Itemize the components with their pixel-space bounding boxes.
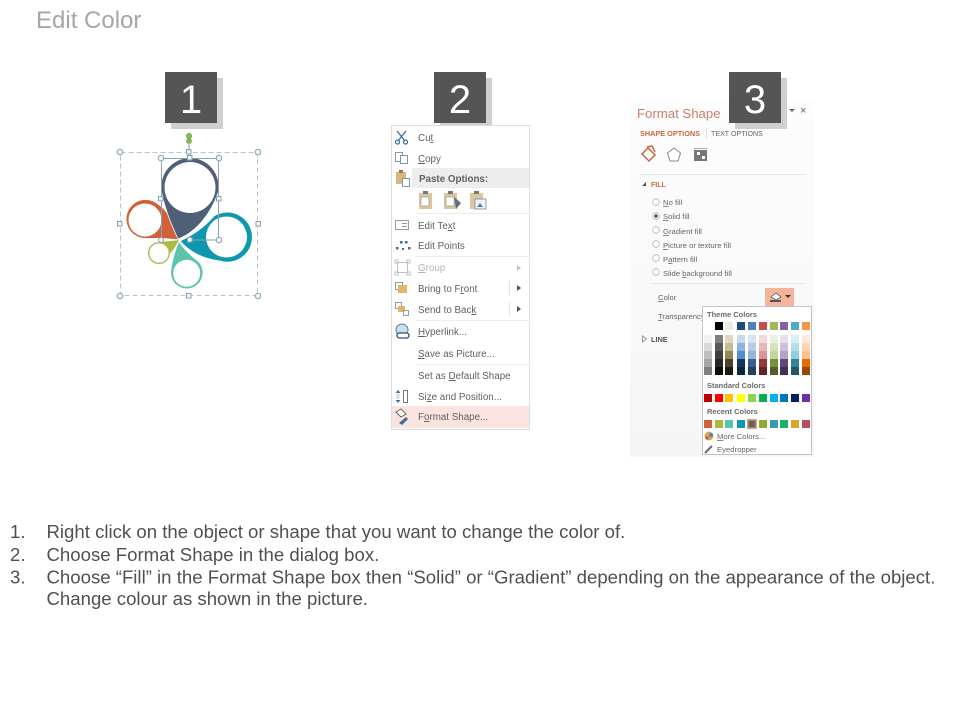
radio labels: No fill bbox=[663, 198, 683, 207]
format shape pane bbox=[630, 100, 814, 457]
pane title: Format Shape bbox=[637, 106, 721, 121]
step 3 number badge bbox=[729, 72, 787, 129]
title: Edit Color bbox=[36, 7, 141, 34]
icon: send to back bbox=[396, 302, 408, 316]
icon: fill bucket bbox=[642, 146, 655, 161]
recent colors row bbox=[704, 419, 810, 429]
line section: LINE bbox=[651, 335, 668, 344]
icon: hyperlink bbox=[396, 324, 409, 338]
theme shade grid bbox=[704, 335, 810, 375]
theme color row bbox=[704, 322, 810, 330]
petal: mint bbox=[171, 241, 203, 289]
icon: group bbox=[395, 260, 410, 275]
instruction list: 2. bbox=[10, 544, 26, 565]
step 2 number badge bbox=[434, 72, 492, 129]
fill section: Transparency bbox=[658, 312, 705, 321]
menu labels: Edit Text bbox=[418, 221, 456, 232]
menu labels: Group bbox=[418, 263, 446, 274]
menu labels: Save as Picture... bbox=[418, 349, 495, 360]
petal shape with selection handles bbox=[117, 134, 261, 299]
menu labels: Edit Points bbox=[418, 241, 465, 252]
icon: edit points bbox=[396, 241, 410, 250]
radio labels: Gradient fill bbox=[663, 227, 702, 236]
petal: slate pin bbox=[161, 158, 219, 239]
instruction list: Choose Format Shape in the dialog box. bbox=[46, 544, 379, 565]
submenu arrows bbox=[510, 265, 521, 316]
instruction list: Choose “Fill” in the Format Shape box then “Solid” or “Gradient” depending on the appearance of the object. bbox=[46, 566, 935, 588]
pane tabs bbox=[640, 128, 763, 138]
menu labels: Paste Options: bbox=[419, 174, 488, 185]
instruction list: Right click on the object or shape that you want to change the color of. bbox=[46, 521, 625, 542]
color button bbox=[765, 288, 794, 306]
fill section bbox=[642, 182, 806, 321]
radio labels: Picture or texture fill bbox=[663, 241, 731, 250]
menu labels: Format Shape... bbox=[418, 412, 488, 423]
icon: cut bbox=[396, 131, 408, 144]
radio labels: Pattern fill bbox=[663, 255, 697, 264]
menu labels: Copy bbox=[418, 154, 441, 165]
icon: bring to front bbox=[396, 282, 407, 293]
step 2 number badge: 2 bbox=[449, 78, 471, 122]
line section bbox=[642, 335, 668, 344]
fill section: Color bbox=[658, 293, 677, 302]
popup labels bbox=[707, 310, 765, 416]
menu labels: Send to Back bbox=[418, 305, 476, 316]
icon: pentagon bbox=[668, 148, 680, 161]
menu labels: Cut bbox=[418, 133, 434, 144]
petal: teal blue bbox=[180, 212, 252, 262]
pane window controls bbox=[789, 105, 806, 117]
pane tabs: SHAPE OPTIONS bbox=[640, 129, 700, 138]
standard colors row bbox=[704, 394, 810, 402]
icon: size and position bbox=[396, 390, 408, 403]
menu labels: Size and Position... bbox=[418, 392, 502, 403]
color picker popup bbox=[702, 306, 812, 454]
step 3 number badge: 3 bbox=[744, 78, 766, 122]
petal: orange bbox=[126, 200, 179, 240]
highlight: paste options bbox=[412, 168, 529, 188]
radio labels bbox=[663, 198, 732, 278]
popup labels: Theme Colors bbox=[707, 310, 757, 319]
pane tabs: TEXT OPTIONS bbox=[711, 130, 763, 138]
radio options bbox=[653, 199, 659, 275]
outer selection frame bbox=[120, 152, 258, 296]
eyedropper option: Eyedropper bbox=[717, 445, 757, 454]
context menu panel bbox=[392, 126, 530, 430]
pane window controls: × bbox=[800, 105, 806, 117]
radio labels: Solid fill bbox=[663, 212, 690, 221]
instruction list: 3. bbox=[10, 566, 26, 588]
menu labels: Hyperlink... bbox=[418, 327, 467, 338]
petal: olive green bbox=[149, 240, 179, 263]
resize handles bbox=[117, 134, 261, 299]
menu labels: Bring to Front bbox=[418, 284, 478, 295]
icon: format shape bbox=[396, 409, 408, 425]
fill section: FILL bbox=[651, 182, 666, 189]
instruction list: Change colour as shown in the picture. bbox=[46, 588, 368, 609]
popup labels: Recent Colors bbox=[707, 407, 758, 416]
more colors option: More Colors... bbox=[717, 432, 765, 441]
step 1 number badge bbox=[165, 72, 223, 129]
popup labels: Standard Colors bbox=[707, 381, 765, 390]
icon: paste bbox=[396, 170, 410, 186]
icon: copy bbox=[396, 152, 408, 164]
step 1 number badge: 1 bbox=[180, 78, 202, 122]
menu labels: Set as Default Shape bbox=[418, 371, 511, 382]
radio labels: Slide background fill bbox=[663, 269, 732, 278]
icon: effects bbox=[694, 148, 707, 161]
instruction list bbox=[10, 521, 935, 609]
icon: edit text bbox=[396, 220, 408, 230]
instruction list: 1. bbox=[10, 521, 26, 542]
icon row: paste options bbox=[419, 191, 486, 209]
menu labels bbox=[418, 133, 511, 423]
inner selection frame bbox=[162, 144, 218, 240]
highlight: format shape bbox=[392, 406, 529, 428]
